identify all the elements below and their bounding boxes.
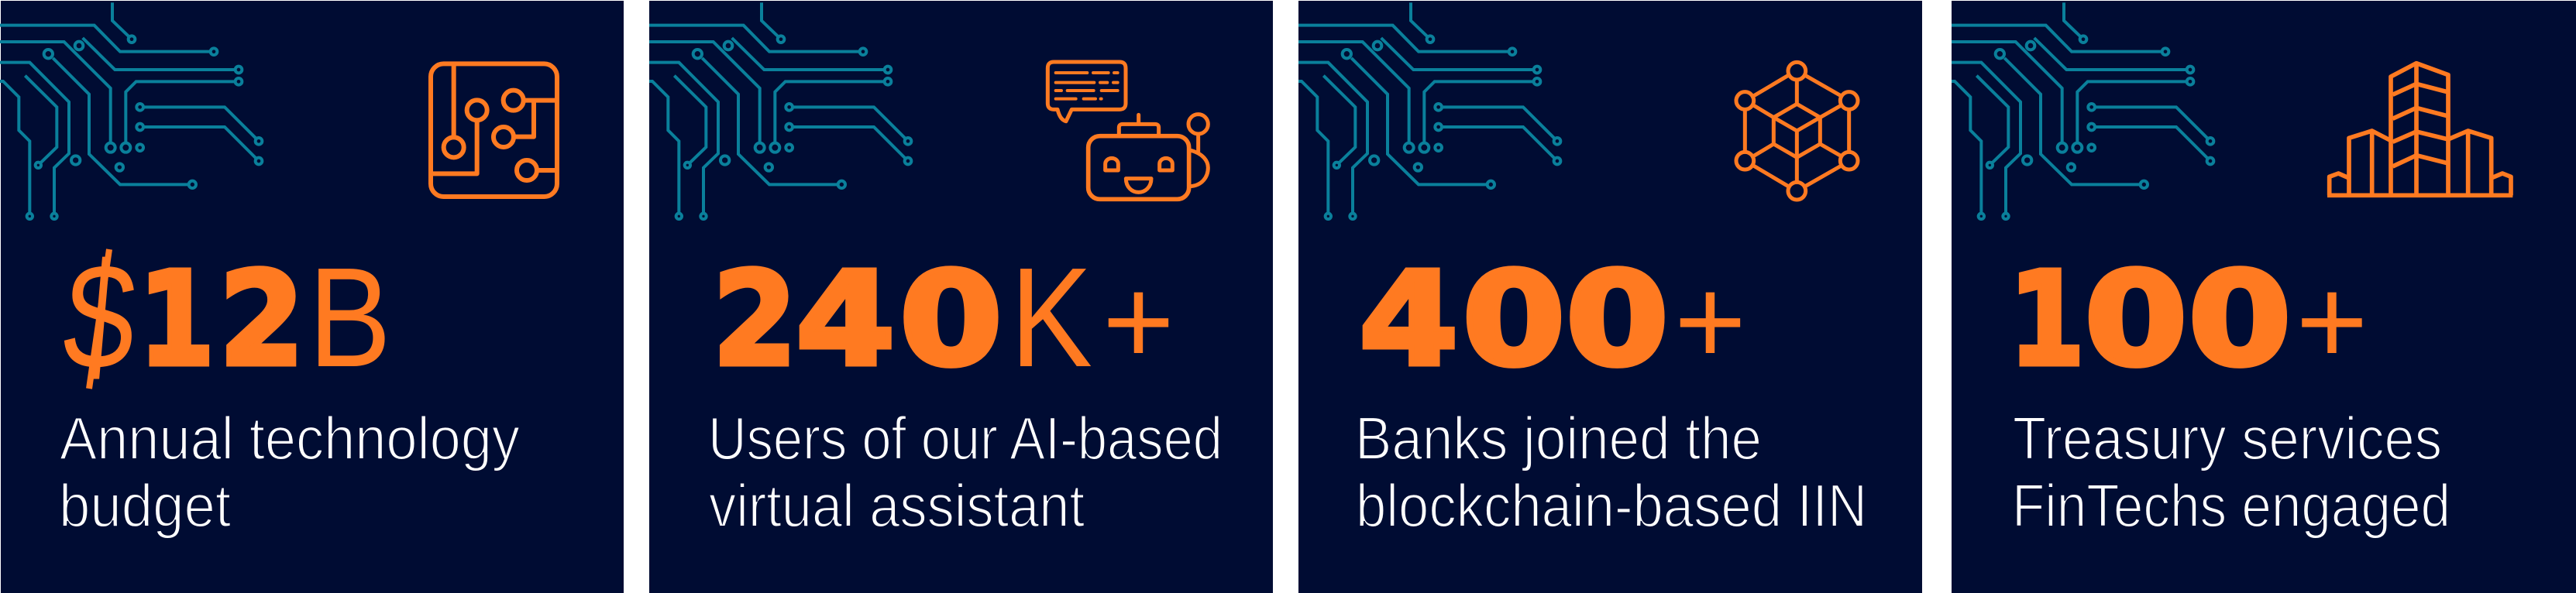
stat: $12B: 2 bbox=[219, 245, 304, 395]
stat: 240K+: 2 bbox=[713, 245, 797, 395]
description: annual technology budget bbox=[59, 404, 520, 540]
stat: 240K+: K bbox=[1010, 238, 1092, 396]
stat: 400+: 4 bbox=[1359, 245, 1458, 395]
stat: 100+: 1 bbox=[2009, 245, 2085, 395]
stat: 400+: + bbox=[1674, 252, 1746, 390]
stat: 100+: + bbox=[2296, 252, 2368, 390]
description: treasury services fintechs engaged: Treasury services bbox=[2013, 404, 2442, 472]
panel background bbox=[1298, 1, 1922, 593]
stat: $12B: B bbox=[308, 238, 391, 396]
panel: treasury fintechs bbox=[1952, 1, 2576, 593]
circuit pattern bbox=[0, 2, 262, 219]
stat: 100+: 0 bbox=[2189, 245, 2291, 395]
panel background bbox=[1952, 1, 2576, 593]
stat: 240K+: 4 bbox=[796, 245, 895, 395]
description: annual technology budget: budget bbox=[59, 471, 231, 540]
stat: 240K+ bbox=[713, 238, 1175, 396]
panel: technology budget bbox=[0, 1, 624, 593]
stat: 100+ bbox=[2009, 245, 2368, 395]
panel: blockchain banks bbox=[1298, 1, 1922, 593]
description: annual technology budget: Annual technology bbox=[60, 404, 520, 472]
description: treasury services fintechs engaged: FinTechs engaged bbox=[2012, 471, 2450, 540]
stat: 240K+: + bbox=[1102, 252, 1175, 390]
icon: chatbot and speech bubble bbox=[1047, 62, 1208, 199]
description: banks joined blockchain-based IIN: blockchain-based IIN bbox=[1356, 471, 1867, 540]
description: banks joined blockchain-based IIN: Banks joined the bbox=[1355, 404, 1762, 472]
circuit pattern bbox=[649, 2, 911, 219]
icon: circuit board bbox=[431, 63, 557, 197]
icon: blockchain cube network bbox=[1736, 62, 1858, 200]
description: users of AI-based virtual assistant: virtual assistant bbox=[709, 471, 1085, 540]
panel background bbox=[1, 1, 624, 593]
panel: virtual assistant users bbox=[649, 1, 1273, 593]
stat: 240K+: 0 bbox=[899, 245, 1003, 395]
description: banks joined blockchain-based IIN bbox=[1355, 404, 1867, 540]
circuit pattern bbox=[1298, 2, 1560, 219]
stat: 400+: 0 bbox=[1566, 245, 1669, 395]
stat: 100+: 0 bbox=[2085, 245, 2187, 395]
stat: $12B bbox=[57, 232, 391, 401]
circuit pattern bbox=[1952, 2, 2213, 219]
stat: 400+: 0 bbox=[1463, 245, 1565, 395]
panel background bbox=[649, 1, 1273, 593]
stat: $12B: 1 bbox=[139, 245, 215, 395]
stat: 400+ bbox=[1359, 245, 1746, 395]
description: users of AI-based virtual assistant: Users of our AI-based bbox=[708, 404, 1223, 472]
stat: $12B: $ bbox=[57, 232, 143, 401]
description: users of AI-based virtual assistant bbox=[708, 404, 1223, 540]
icon: city buildings bbox=[2327, 63, 2512, 195]
description: treasury services fintechs engaged bbox=[2012, 404, 2450, 540]
